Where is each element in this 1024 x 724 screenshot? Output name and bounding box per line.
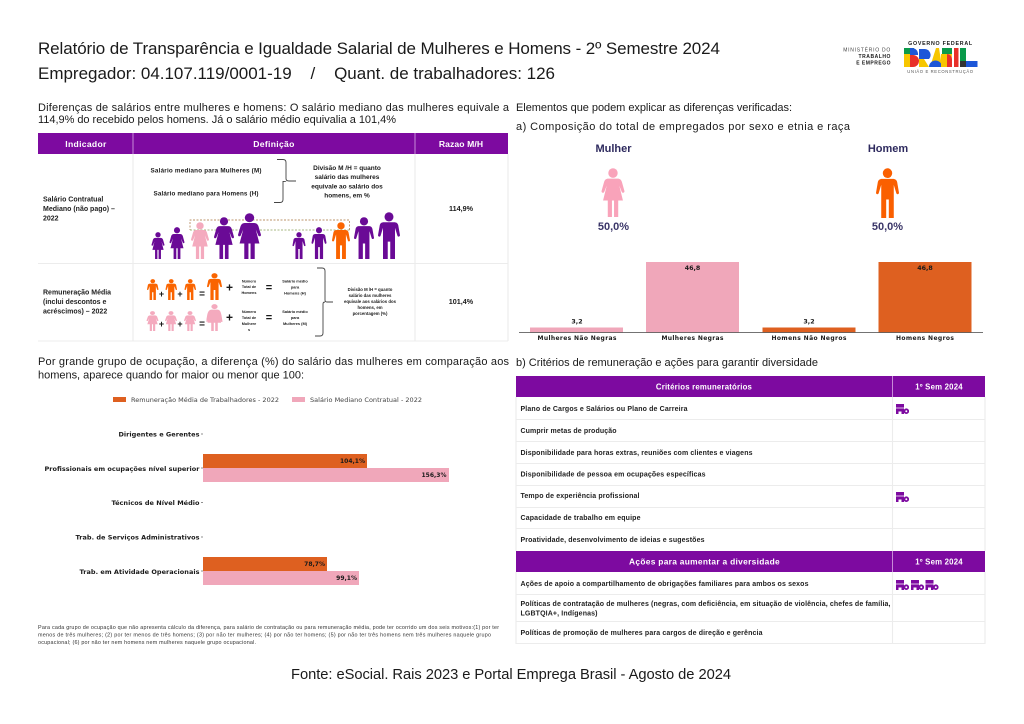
row label: salário contratual: Mediano (não pago) – (43, 206, 115, 213)
text: divisão M/H: equivale ao salário dos (311, 184, 383, 190)
formula: mulheres: para (291, 315, 300, 320)
table header: Indicador (65, 139, 107, 149)
bar chart: ocupação: Técnicos de Nível Médio (112, 499, 200, 507)
B (904, 48, 914, 54)
bar chart: sexo e raça: 46,8 (685, 265, 700, 272)
bars: operacionais (203, 557, 359, 585)
formula: mulheres: s (248, 328, 250, 332)
text: composição: a) Composição do total de empregados por sexo e etnia e raça (516, 121, 851, 133)
text: divisão M/H: Divisão M /H = quanto (313, 165, 381, 172)
A (930, 48, 942, 67)
logo: governo federal brasil: UNIÃO E RECONSTRUÇÃO (907, 69, 974, 74)
icon: plano de cargos (896, 404, 908, 414)
table header (38, 133, 508, 154)
text: divisão M/H média: porcentagem (%) (353, 311, 388, 316)
source: Fonte: eSocial. Rais 2023 e Portal Emprega Brasil - Agosto de 2024 (291, 667, 731, 683)
text: diferenças de salários: Diferenças de salários entre mulheres e homens: O salário mediano das mulheres equivale a (38, 102, 510, 114)
bar chart: sexo e raça: Mulheres Negras (662, 335, 724, 342)
text: critérios: b) Critérios de remuneração e ações para garantir diversidade (516, 357, 818, 369)
logo: governo federal brasil (904, 41, 978, 74)
formula: mulheres: + (159, 319, 164, 329)
logo: ministério: MINISTÉRIO DO (843, 46, 891, 54)
R (919, 49, 931, 59)
text: divisão M/H média: equivale aos salários dos (344, 299, 397, 304)
bars: operacionais: 78,7% (304, 561, 325, 568)
header: ações: Ações para aumentar a diversidade (629, 556, 780, 566)
footnote (38, 625, 499, 646)
formula: homens: Salário médio (282, 278, 308, 284)
bar chart: sexo e raça: 46,8 (917, 265, 933, 272)
text: elementos: Elementos que podem explicar as diferenças verificadas: (516, 102, 792, 114)
formula: mulheres: Mulhere (242, 322, 256, 326)
rows: critérios: Tempo de experiência profissional (520, 493, 640, 500)
rows: ações: Ações de apoio a compartilhamento de obrigações familiares para ambos os sexos (520, 581, 809, 588)
chart legend (113, 396, 422, 404)
formula: mulheres (147, 304, 308, 332)
formula: homens: Total de (242, 285, 256, 289)
bar chart: ocupação: Trab. em Atividade Operacionais (80, 568, 200, 576)
row label: salário contratual (43, 196, 115, 222)
rows: critérios: Plano de Cargos e Salários ou Plano de Carreira (520, 406, 688, 413)
row label: remuneração média: Remuneração Média (43, 290, 111, 296)
bars: operacionais: 99,1% (336, 575, 357, 582)
bracket (315, 268, 333, 336)
bar chart: ocupação (44, 430, 449, 585)
header: critérios remuneratórios: Critérios remuneratórios (656, 382, 753, 392)
rows: ações: Políticas de contratação de mulheres (negras, com deficiência, em situação de violência, chefes de família, (520, 601, 891, 608)
table header: Razao M/H (439, 139, 483, 149)
panel: mulher (595, 143, 632, 233)
text: diferenças de salários (38, 102, 510, 126)
rows: critérios: Capacidade de trabalho em equipe (520, 515, 641, 522)
logo: ministério: TRABALHO (859, 54, 891, 60)
logo: ministério: E EMPREGO (856, 60, 891, 66)
text: divisão M/H: salário das mulheres (315, 174, 380, 181)
text: divisão M/H: homens, em % (324, 192, 370, 200)
L (960, 48, 966, 61)
title: Relatório de Transparência e Igualdade Salarial de Mulheres e Homens - 2º Semestre 2024 (38, 39, 720, 58)
I (954, 48, 958, 67)
bar chart: sexo e raça: 3,2 (571, 318, 583, 326)
formula: homens: + (177, 289, 183, 299)
text: grande grupo de ocupação: homens, aparece quando for maior ou menor que 100: (38, 370, 304, 382)
chart legend: Remuneração Média de Trabalhadores - 2022 (131, 396, 279, 404)
text: divisão M/H média: salário das mulheres (349, 293, 392, 298)
icons: ações de apoio (896, 580, 938, 590)
bar chart: sexo e raça: Homens Não Negros (772, 335, 847, 342)
bar chart: ocupação: Profissionais em ocupações nível superior (44, 465, 200, 473)
formula: homens: + (226, 280, 233, 294)
panel: mulher: Mulher (595, 143, 632, 155)
icons: men scale (293, 212, 400, 259)
bracket (274, 160, 296, 202)
header: critérios remuneratórios: 1º Sem 2024 (915, 382, 963, 392)
definition: mediano: Salário mediano para Homens (H) (154, 190, 258, 198)
formula: mulheres: = (199, 319, 205, 330)
text: grande grupo de ocupação: Por grande grupo de ocupação, a diferença (%) do salário das mulheres em comparação aos (38, 356, 510, 368)
bar chart: sexo e raça: Homens Negros (896, 335, 954, 342)
title (38, 39, 720, 83)
rows: ações: Políticas de promoção de mulheres para cargos de direção e gerência (520, 630, 763, 637)
icon: tempo de experiência (896, 492, 908, 502)
value: 114,9%: 114,9% (449, 204, 474, 213)
formula: homens: para (291, 284, 300, 290)
formula: homens: = (266, 282, 272, 294)
rows: critérios: Disponibilidade para horas extras, reuniões com clientes e viagens (520, 450, 753, 457)
formula: mulheres: + (226, 310, 233, 324)
formula: mulheres: Número (242, 310, 257, 314)
formula: homens: Número (242, 280, 257, 284)
bar chart: sexo e raça (519, 262, 983, 342)
title: Empregador: 04.107.119/0001-19 / Quant. de trabalhadores: 126 (38, 64, 555, 83)
bars: profissionais: 156,3% (422, 472, 446, 479)
rows: ações: LGBTQIA+, Indígenas) (520, 610, 598, 618)
definition: mediano: Salário mediano para Mulheres (M) (150, 168, 262, 174)
table header: Definição (253, 139, 295, 149)
bar chart: ocupação: Dirigentes e Gerentes (118, 430, 200, 438)
formula: mulheres: Mulheres (M) (283, 321, 308, 326)
header: ações: 1º Sem 2024 (915, 558, 963, 566)
row label: remuneração média: acréscimos) – 2022 (43, 308, 107, 316)
formula: homens: + (159, 289, 164, 299)
formula: mulheres: Salário médio (282, 309, 308, 314)
text: diferenças de salários: 114,9% do recebido pelos homens. Já o salário médio equivalia a 101,4% (38, 114, 396, 126)
rows: critérios (520, 406, 753, 544)
value: 101,4%: 101,4% (449, 297, 474, 306)
text: divisão M/H (311, 165, 383, 200)
footnote: Para cada grupo de ocupação que não apresenta cálculo da diferença, para salário de contratação ou para remuneração média, pode ter ocorrido um dos seis motivos:(1) por ter (38, 625, 499, 631)
bars: profissionais (203, 454, 449, 482)
rows: ações (520, 581, 891, 637)
panel: homem (868, 143, 908, 233)
formula: homens: Homens (242, 291, 256, 295)
row label: salário contratual: Salário Contratual (43, 196, 103, 204)
text: divisão M/H média: homens, em (357, 305, 383, 310)
formula: homens: = (199, 289, 205, 300)
panel: homem: Homem (868, 143, 908, 155)
text: divisão M/H média (344, 287, 397, 316)
text: divisão M/H média: Divisão M /H = quanto (348, 287, 393, 292)
panel: mulher: 50,0% (598, 221, 629, 233)
formula: homens (147, 273, 308, 300)
row label: remuneração média (43, 290, 111, 316)
icons: women scale (152, 213, 261, 259)
row label: salário contratual: 2022 (43, 216, 59, 222)
header: ações (516, 551, 985, 572)
footnote: menos de três mulheres; (2) por ter menos de três homens; (3) por não ter mulheres; (4) por não ter homens; (5) por não ter três homens nem três mulheres naquele grupo (38, 632, 491, 638)
text: grande grupo de ocupação (38, 356, 510, 382)
rows: critérios: Cumprir metas de produção (520, 428, 616, 435)
bar chart: sexo e raça: Mulheres Não Negras (538, 335, 617, 342)
formula: homens: Homens (H) (284, 290, 307, 296)
formula: mulheres: + (177, 319, 183, 329)
definition: mediano (150, 168, 262, 198)
row label: remuneração média: (inclui descontos e (43, 299, 107, 306)
bar chart: ocupação: Trab. de Serviços Administrativos (76, 534, 200, 542)
logo: ministério (843, 46, 891, 66)
formula: mulheres: = (266, 312, 272, 324)
logo: governo federal brasil: GOVERNO FEDERAL (908, 41, 973, 47)
chart legend: Salário Mediano Contratual - 2022 (310, 396, 422, 404)
panel: homem: 50,0% (872, 221, 903, 233)
dashed comparison box (190, 220, 350, 230)
rows: critérios: Disponibilidade de pessoa em ocupações específicas (520, 472, 706, 478)
header: critérios remuneratórios (516, 376, 985, 397)
panel: tabela critérios (516, 376, 985, 644)
footnote: ocupacional; (6) por não ter nem homens nem mulheres naquele grupo ocupacional. (38, 640, 256, 646)
bars: profissionais: 104,1% (340, 458, 365, 465)
bar chart: sexo e raça: 3,2 (803, 318, 815, 326)
panel: tabela indicadores (38, 133, 508, 341)
S (942, 48, 952, 54)
formula: mulheres: Total de (242, 316, 256, 320)
rows: critérios: Proatividade, desenvolvimento de ideias e sugestões (520, 537, 705, 544)
